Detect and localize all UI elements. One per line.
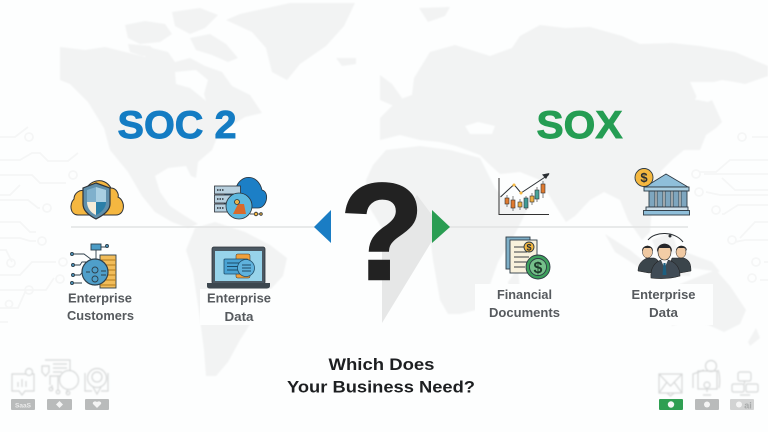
icon: enterprise customers network [70,244,116,288]
label: financial documents: Documents [489,305,560,320]
heading: SOX: SOX [536,104,622,147]
badge: ai [730,399,754,410]
label: enterprise data left: Enterprise [207,290,271,306]
label: enterprise customers [67,290,134,323]
label: enterprise customers: Enterprise [68,290,132,306]
badge: grey heart [85,399,109,410]
label: enterprise data right: Data [649,305,679,320]
label: enterprise data left: Data [224,309,254,324]
icon: business people [638,233,691,279]
world map background [60,3,768,376]
label: financial documents [489,287,560,320]
divider line [71,226,688,228]
label: enterprise customers: Customers [67,308,134,323]
icon: financial documents [506,237,550,279]
label: enterprise data left [207,290,271,324]
question mark: ? [340,156,424,309]
icon: laptop [207,247,270,288]
label: financial documents: Financial [497,287,552,302]
bottom question text: Which Does [328,355,434,374]
icon: saas screen [12,368,34,395]
badge: grey diamond [47,399,72,410]
faded icons: bottom right [659,360,758,396]
heading: SOC 2: SOC 2 [118,104,236,147]
icon: financial documents: $ [534,260,543,277]
icon: financial documents: $ [526,242,532,252]
icon: map pin [85,368,108,394]
icon: document network [42,360,78,395]
bottom question text [287,355,475,396]
icon: cloud server [214,177,267,219]
label: enterprise data right [632,287,696,320]
label: enterprise data right: Enterprise [632,287,696,302]
icon: bank with coin [635,168,690,215]
icon: person with pin [693,360,720,395]
icon: envelope [659,374,682,396]
badge: green [659,399,683,410]
arrow: right green [432,210,450,243]
icon: cloud shield [71,181,123,219]
faded icons: bottom left [12,360,108,395]
badge: SaaS [11,399,35,410]
arrow: left blue [314,210,331,243]
badge: SaaS: SaaS [15,402,32,410]
icon: bank with coin: $ [640,170,648,185]
center shadow [382,195,432,323]
decorative circuit traces [0,127,768,322]
badge: ai: ai [744,400,752,410]
white label backdrops [60,284,713,326]
badge: grey dot [695,399,719,410]
bottom question text: Your Business Need? [287,378,475,396]
icon: candlestick chart [499,173,550,214]
icon: connected boxes [732,372,758,395]
